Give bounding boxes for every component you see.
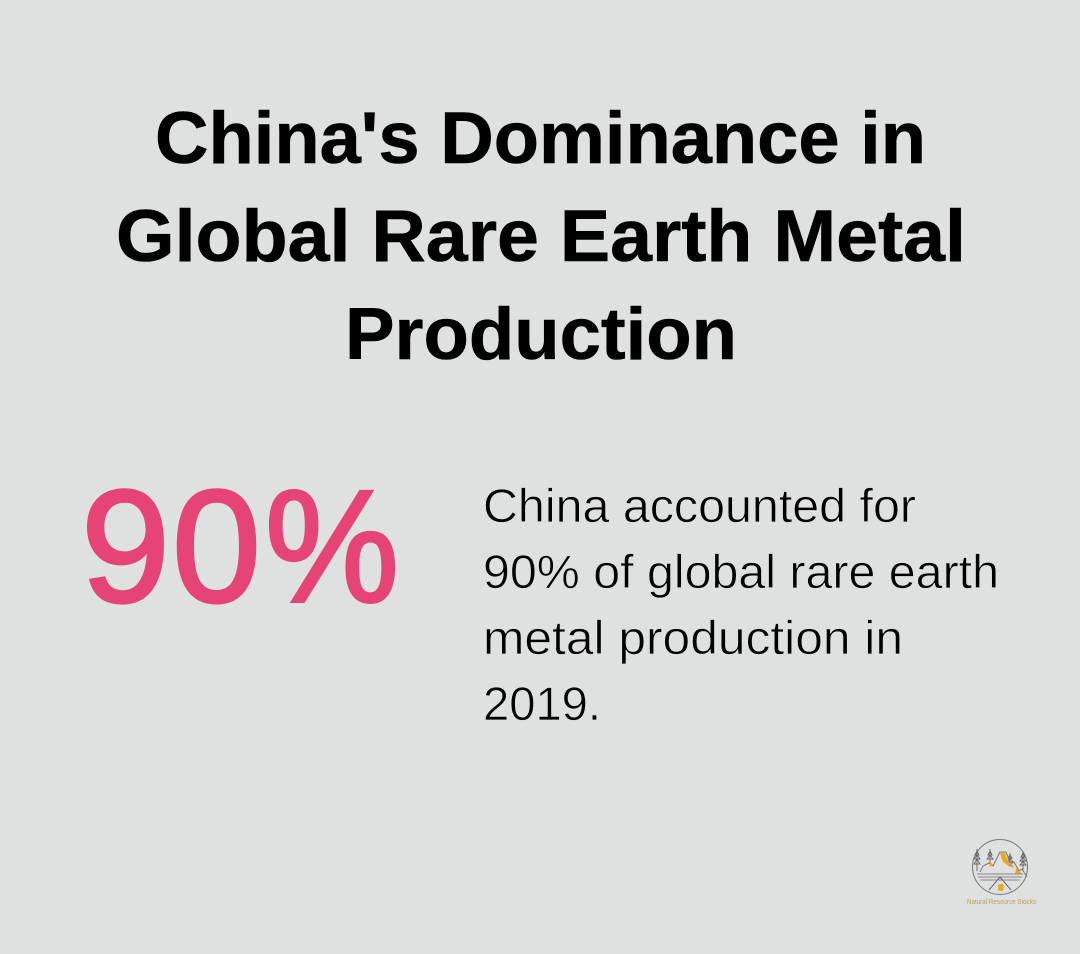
- logo cabin: [989, 877, 1011, 890]
- description text: metal production in: [483, 611, 903, 664]
- logo circle: [972, 840, 1028, 894]
- big statistic: 90%: [81, 456, 399, 636]
- logo trees: [974, 849, 1026, 871]
- title: [116, 98, 966, 375]
- big statistic: 90%: 9: [81, 456, 170, 636]
- logo caption: Natural Resource Stocks: [967, 899, 1036, 906]
- big statistic: 90%: %: [265, 456, 399, 636]
- description text: [483, 479, 999, 730]
- title: Global Rare Earth Metal: [116, 196, 966, 277]
- title: Production: [345, 294, 737, 375]
- description text: China accounted for: [483, 479, 916, 532]
- logo mountain highlights: [990, 853, 1022, 874]
- logo: Natural Resource Stocks: [967, 840, 1036, 906]
- title: China's Dominance in: [155, 98, 926, 179]
- big statistic: 90%: 0: [172, 456, 261, 636]
- description text: 90% of global rare earth: [483, 545, 999, 598]
- logo mountains: [980, 852, 1027, 877]
- logo water lines: [977, 874, 1023, 880]
- description text: 2019.: [483, 677, 601, 730]
